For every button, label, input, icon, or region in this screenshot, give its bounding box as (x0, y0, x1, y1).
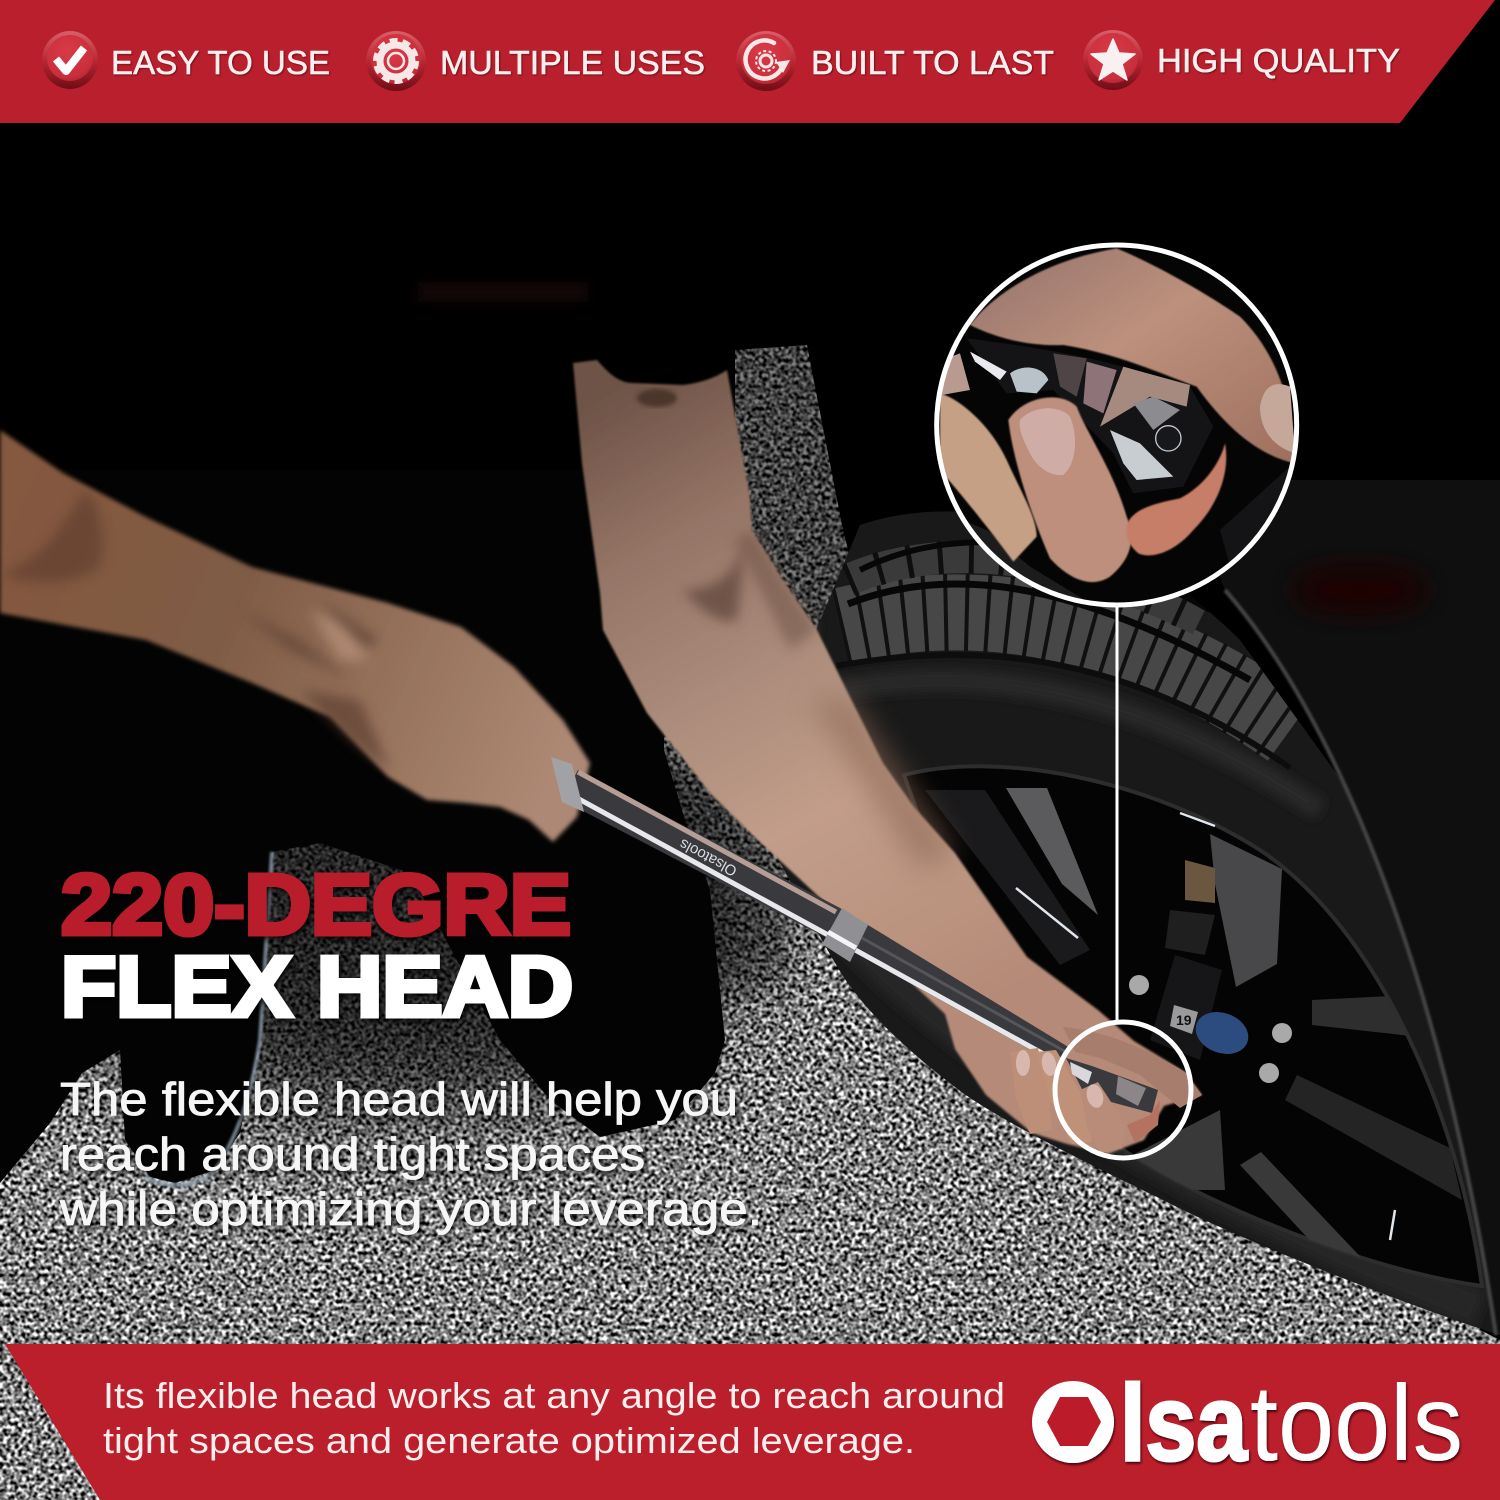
body text: The flexible head will help you (60, 1073, 738, 1125)
logo: Olsatools: tools (1250, 1362, 1463, 1483)
wheel spokes (925, 788, 1462, 1270)
logo: Olsatools: O (1032, 1366, 1114, 1483)
tyre (760, 511, 1500, 1335)
heading: 220-DEGRE (61, 858, 571, 953)
body text (59, 1073, 762, 1235)
fingers on wrench (1010, 1027, 1202, 1153)
connector line (1116, 602, 1118, 1022)
bottom caption (103, 1375, 1005, 1461)
label: high quality: HIGH QUALITY (1157, 42, 1400, 79)
index finger (940, 393, 1037, 562)
icon: star badge (1083, 30, 1143, 90)
chrome socket (967, 338, 1213, 493)
icon: cycle gear badge (736, 31, 796, 91)
wheel glints (1016, 813, 1395, 1240)
bottom caption: tight spaces and generate optimized leverage. (103, 1420, 915, 1461)
heading (61, 858, 573, 1035)
little finger (1126, 443, 1226, 555)
right arm (573, 360, 1202, 1154)
logo: Olsatools (1032, 1362, 1463, 1483)
middle finger (1008, 397, 1131, 582)
body text: reach around tight spaces (60, 1128, 645, 1180)
socket on lug nut (1150, 955, 1222, 1060)
car body and fender (1180, 480, 1500, 1335)
shoe outline (145, 852, 272, 1185)
torque wrench: Olsatools (677, 835, 740, 879)
icon: check badge (42, 31, 98, 89)
body text: while optimizing your leverage. (59, 1183, 762, 1235)
magnified inset (934, 242, 1300, 608)
gravel floor (0, 340, 1500, 1500)
label: built to last: BUILT TO LAST (811, 44, 1054, 81)
bottom caption: Its flexible head works at any angle to reach around (103, 1375, 1005, 1416)
lug nuts (1129, 975, 1292, 1083)
top thumb (970, 248, 1295, 463)
person torso and trousers (0, 470, 740, 1183)
small focus circle (1055, 1022, 1191, 1158)
top banner (0, 0, 1495, 123)
index fingernail (942, 353, 970, 395)
faint shirt logo (418, 282, 588, 302)
torque wrench (551, 757, 1070, 1066)
bottom banner (5, 1344, 1500, 1500)
label: multiple uses: MULTIPLE USES (440, 44, 705, 81)
alloy wheel (904, 766, 1482, 1286)
tyre in inset (969, 523, 1084, 600)
wheel centre badge (1190, 1005, 1254, 1061)
socket on lug nut: 19 (1176, 1012, 1192, 1028)
icon: gear badge (366, 31, 426, 91)
left arm and hand (0, 430, 590, 842)
heading: FLEX HEAD (61, 940, 573, 1035)
logo: Olsatools: lsa (1120, 1362, 1248, 1483)
label: easy to use: EASY TO USE (111, 44, 330, 81)
